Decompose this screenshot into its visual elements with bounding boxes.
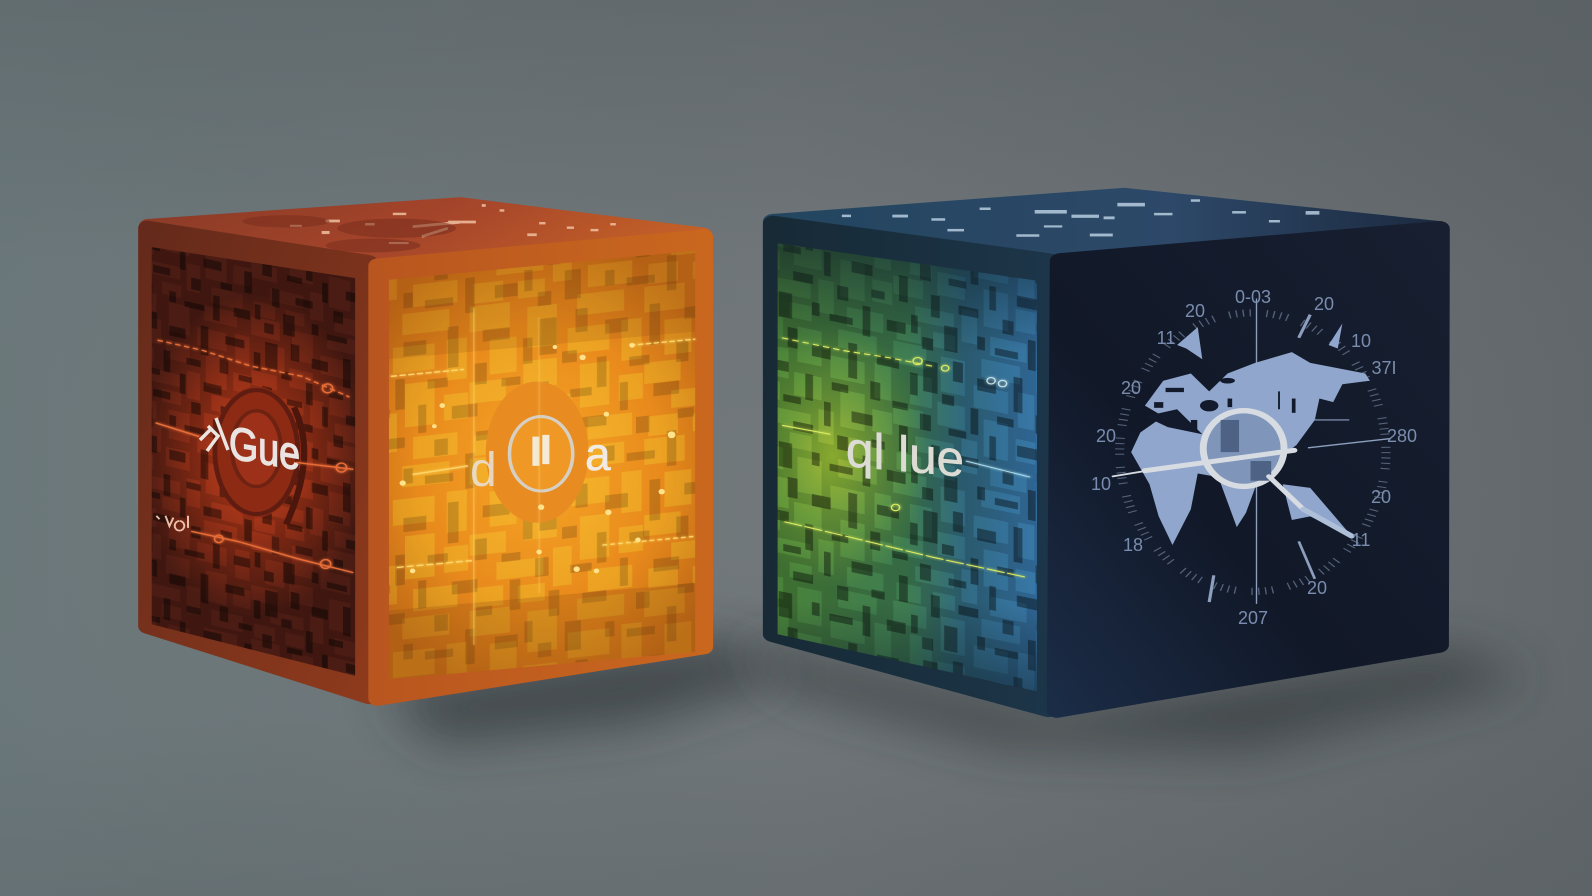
blue cube right dark face <box>1057 229 1440 710</box>
compass degree labels: 37I <box>1371 358 1397 378</box>
right face light dots <box>400 343 676 573</box>
compass degree labels: 18 <box>1123 535 1143 555</box>
blue cube top face <box>773 196 1439 259</box>
compass axis lines <box>1209 299 1391 604</box>
lens inner detail <box>1221 420 1271 481</box>
right face circuit lines <box>391 307 695 645</box>
green to blue mosaic <box>773 238 1044 699</box>
compass degree labels: 280 <box>1387 426 1417 446</box>
label: a: a <box>585 428 611 480</box>
pause bars icon <box>532 435 549 466</box>
map dark speckles <box>1145 378 1296 434</box>
blue cube left face <box>773 224 1048 709</box>
arrow glyph beside Gue <box>200 418 228 451</box>
compass degree labels: 20 <box>1185 301 1205 321</box>
compass degree labels: 11 <box>1352 530 1370 550</box>
magnifier lens <box>1203 411 1284 486</box>
cube left red face <box>147 228 369 697</box>
left face target rings <box>213 387 304 524</box>
label: d: d <box>470 444 497 497</box>
compass degree labels: 10 <box>1351 331 1371 351</box>
top face speckles <box>842 199 1319 237</box>
compass degree labels: 11 <box>1157 328 1175 348</box>
compass degree labels: 207 <box>1238 608 1268 628</box>
magnifier handle and bar <box>1113 450 1352 536</box>
compass degree labels: 20 <box>1121 378 1141 398</box>
red and orange data cube <box>144 204 704 698</box>
compass degree labels: 20 <box>1096 426 1116 446</box>
world map compass <box>1113 299 1391 604</box>
compass degree labels: 20 <box>1371 487 1391 507</box>
mosaic circuit lines <box>782 338 1030 577</box>
left face mosaic <box>152 247 356 676</box>
cube shadows <box>380 640 1530 750</box>
continents <box>1131 324 1370 545</box>
compass degree labels: 20 <box>1314 294 1334 314</box>
compass degree labels: 10 <box>1091 474 1111 494</box>
right face center disc <box>486 381 589 523</box>
cube right orange face <box>377 237 704 698</box>
right face mosaic <box>385 245 701 683</box>
compass tick ring <box>1120 313 1386 591</box>
compass degree labels: 20 <box>1307 578 1327 598</box>
left face circuit lines <box>156 340 353 573</box>
blue and green data cube <box>773 196 1440 710</box>
left face lower-left glyphs <box>156 516 188 531</box>
label: Gue: Gue <box>229 416 300 480</box>
cube body red top face <box>148 205 703 264</box>
compass degree labels <box>1091 287 1417 628</box>
label: ql lue: ql lue <box>846 421 964 488</box>
top face speckles <box>290 204 616 244</box>
top face darker mottling <box>243 215 456 252</box>
compass degree labels: 0-03 <box>1235 287 1271 307</box>
